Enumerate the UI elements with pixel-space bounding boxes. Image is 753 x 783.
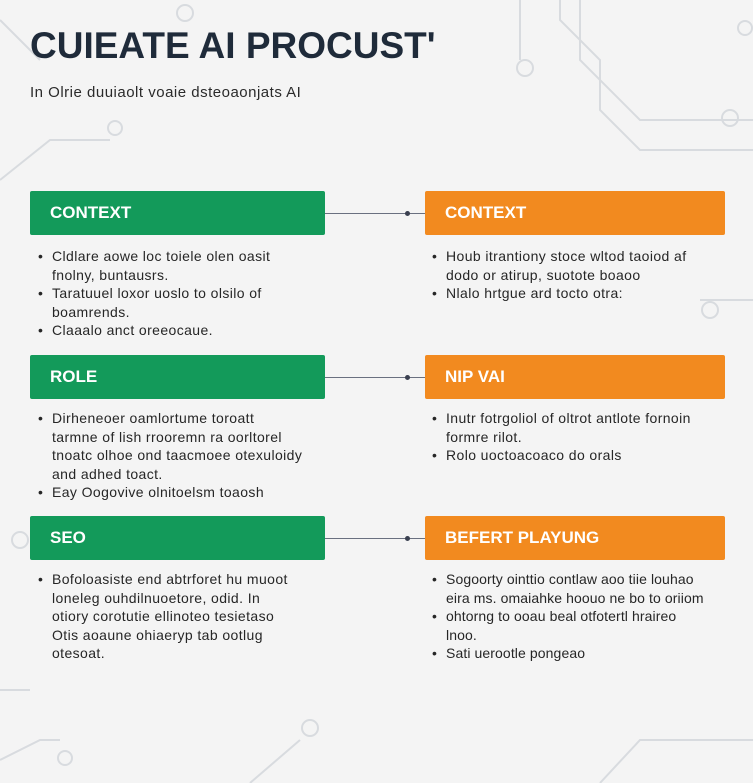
list: role: tnoatc olhoe ond taacmoee otexuloidy [52, 447, 302, 463]
panel: befert playung orange [425, 516, 725, 560]
list: befert playung: Sati uerootle pongeao [446, 645, 585, 661]
panel: nip vai orange: NIP VAI [445, 367, 505, 386]
list: context orange [432, 248, 686, 301]
list: context orange: dodo or atirup, suotote boaoo [446, 266, 641, 282]
list: nip vai: Inutr fotrgoliol of oltrot antlote fornoin [446, 410, 691, 426]
list: seo [38, 571, 288, 661]
list: role [38, 410, 302, 500]
list: context green: fnolny, buntausrs. [52, 266, 169, 282]
connector 1 [325, 213, 425, 214]
connector 2 [325, 377, 425, 378]
list: seo: Otis aoaune ohiaeryp tab ootlug [52, 626, 263, 642]
list: context green: boamrends. [52, 304, 130, 320]
connector 3 [325, 538, 425, 539]
panel: seo green [30, 516, 325, 560]
list: role: Eay Oogovive olnitoelsm toaosh [52, 484, 264, 500]
list: context orange: Nlalo hrtgue ard tocto otra: [446, 285, 623, 301]
list: context green: Taratuuel loxor uoslo to olsilo of [52, 285, 262, 301]
list: befert playung: eira ms. omaiahke hoouo ne bo to oriiom [446, 590, 704, 606]
list: role: tarmne of lish rrooremn ra oorltorel [52, 428, 282, 444]
panel: befert playung orange: BEFERT PLAYUNG [445, 528, 599, 547]
list: role: and adhed toact. [52, 466, 163, 482]
list: seo: Bofoloasiste end abtrforet hu muoot [52, 571, 288, 587]
title: CUIEATE AI PROCUST' [30, 25, 436, 66]
list: role: Dirheneoer oamlortume toroatt [52, 410, 254, 426]
list: befert playung [432, 571, 704, 661]
list: context green [38, 248, 270, 338]
list: seo: loneleg ouhdilnuoetore, odid. In [52, 590, 260, 606]
list: befert playung: Sogoorty ointtio contlaw aoo tiie louhao [446, 571, 694, 587]
list: nip vai: Rolo uoctoacoaco do orals [446, 447, 622, 463]
list: nip vai: formre rilot. [446, 428, 522, 444]
list: context green: Claaalo anct oreeocaue. [52, 322, 213, 338]
list: context orange: Houb itrantiony stoce wltod taoiod af [446, 248, 686, 264]
panel: role green: ROLE [50, 367, 97, 386]
panel: context orange: CONTEXT [445, 203, 526, 222]
list: nip vai [432, 410, 691, 463]
panel: seo green: SEO [50, 528, 86, 547]
list: befert playung: ohtorng to ooau beal otfotertl hraireo [446, 608, 676, 624]
subtitle: In Olrie duuiaolt voaie dsteoaonjats AI [30, 84, 301, 101]
list: context green: Cldlare aowe loc toiele olen oasit [52, 248, 270, 264]
panel: nip vai orange [425, 355, 725, 399]
list: befert playung: lnoo. [446, 626, 477, 642]
panel: context green [30, 191, 325, 235]
panel: role green [30, 355, 325, 399]
list: seo: otesoat. [52, 645, 105, 661]
list: seo: otiory corotutie ellinoteo tesietaso [52, 608, 274, 624]
panel: context orange [425, 191, 725, 235]
panel: context green: CONTEXT [50, 203, 131, 222]
